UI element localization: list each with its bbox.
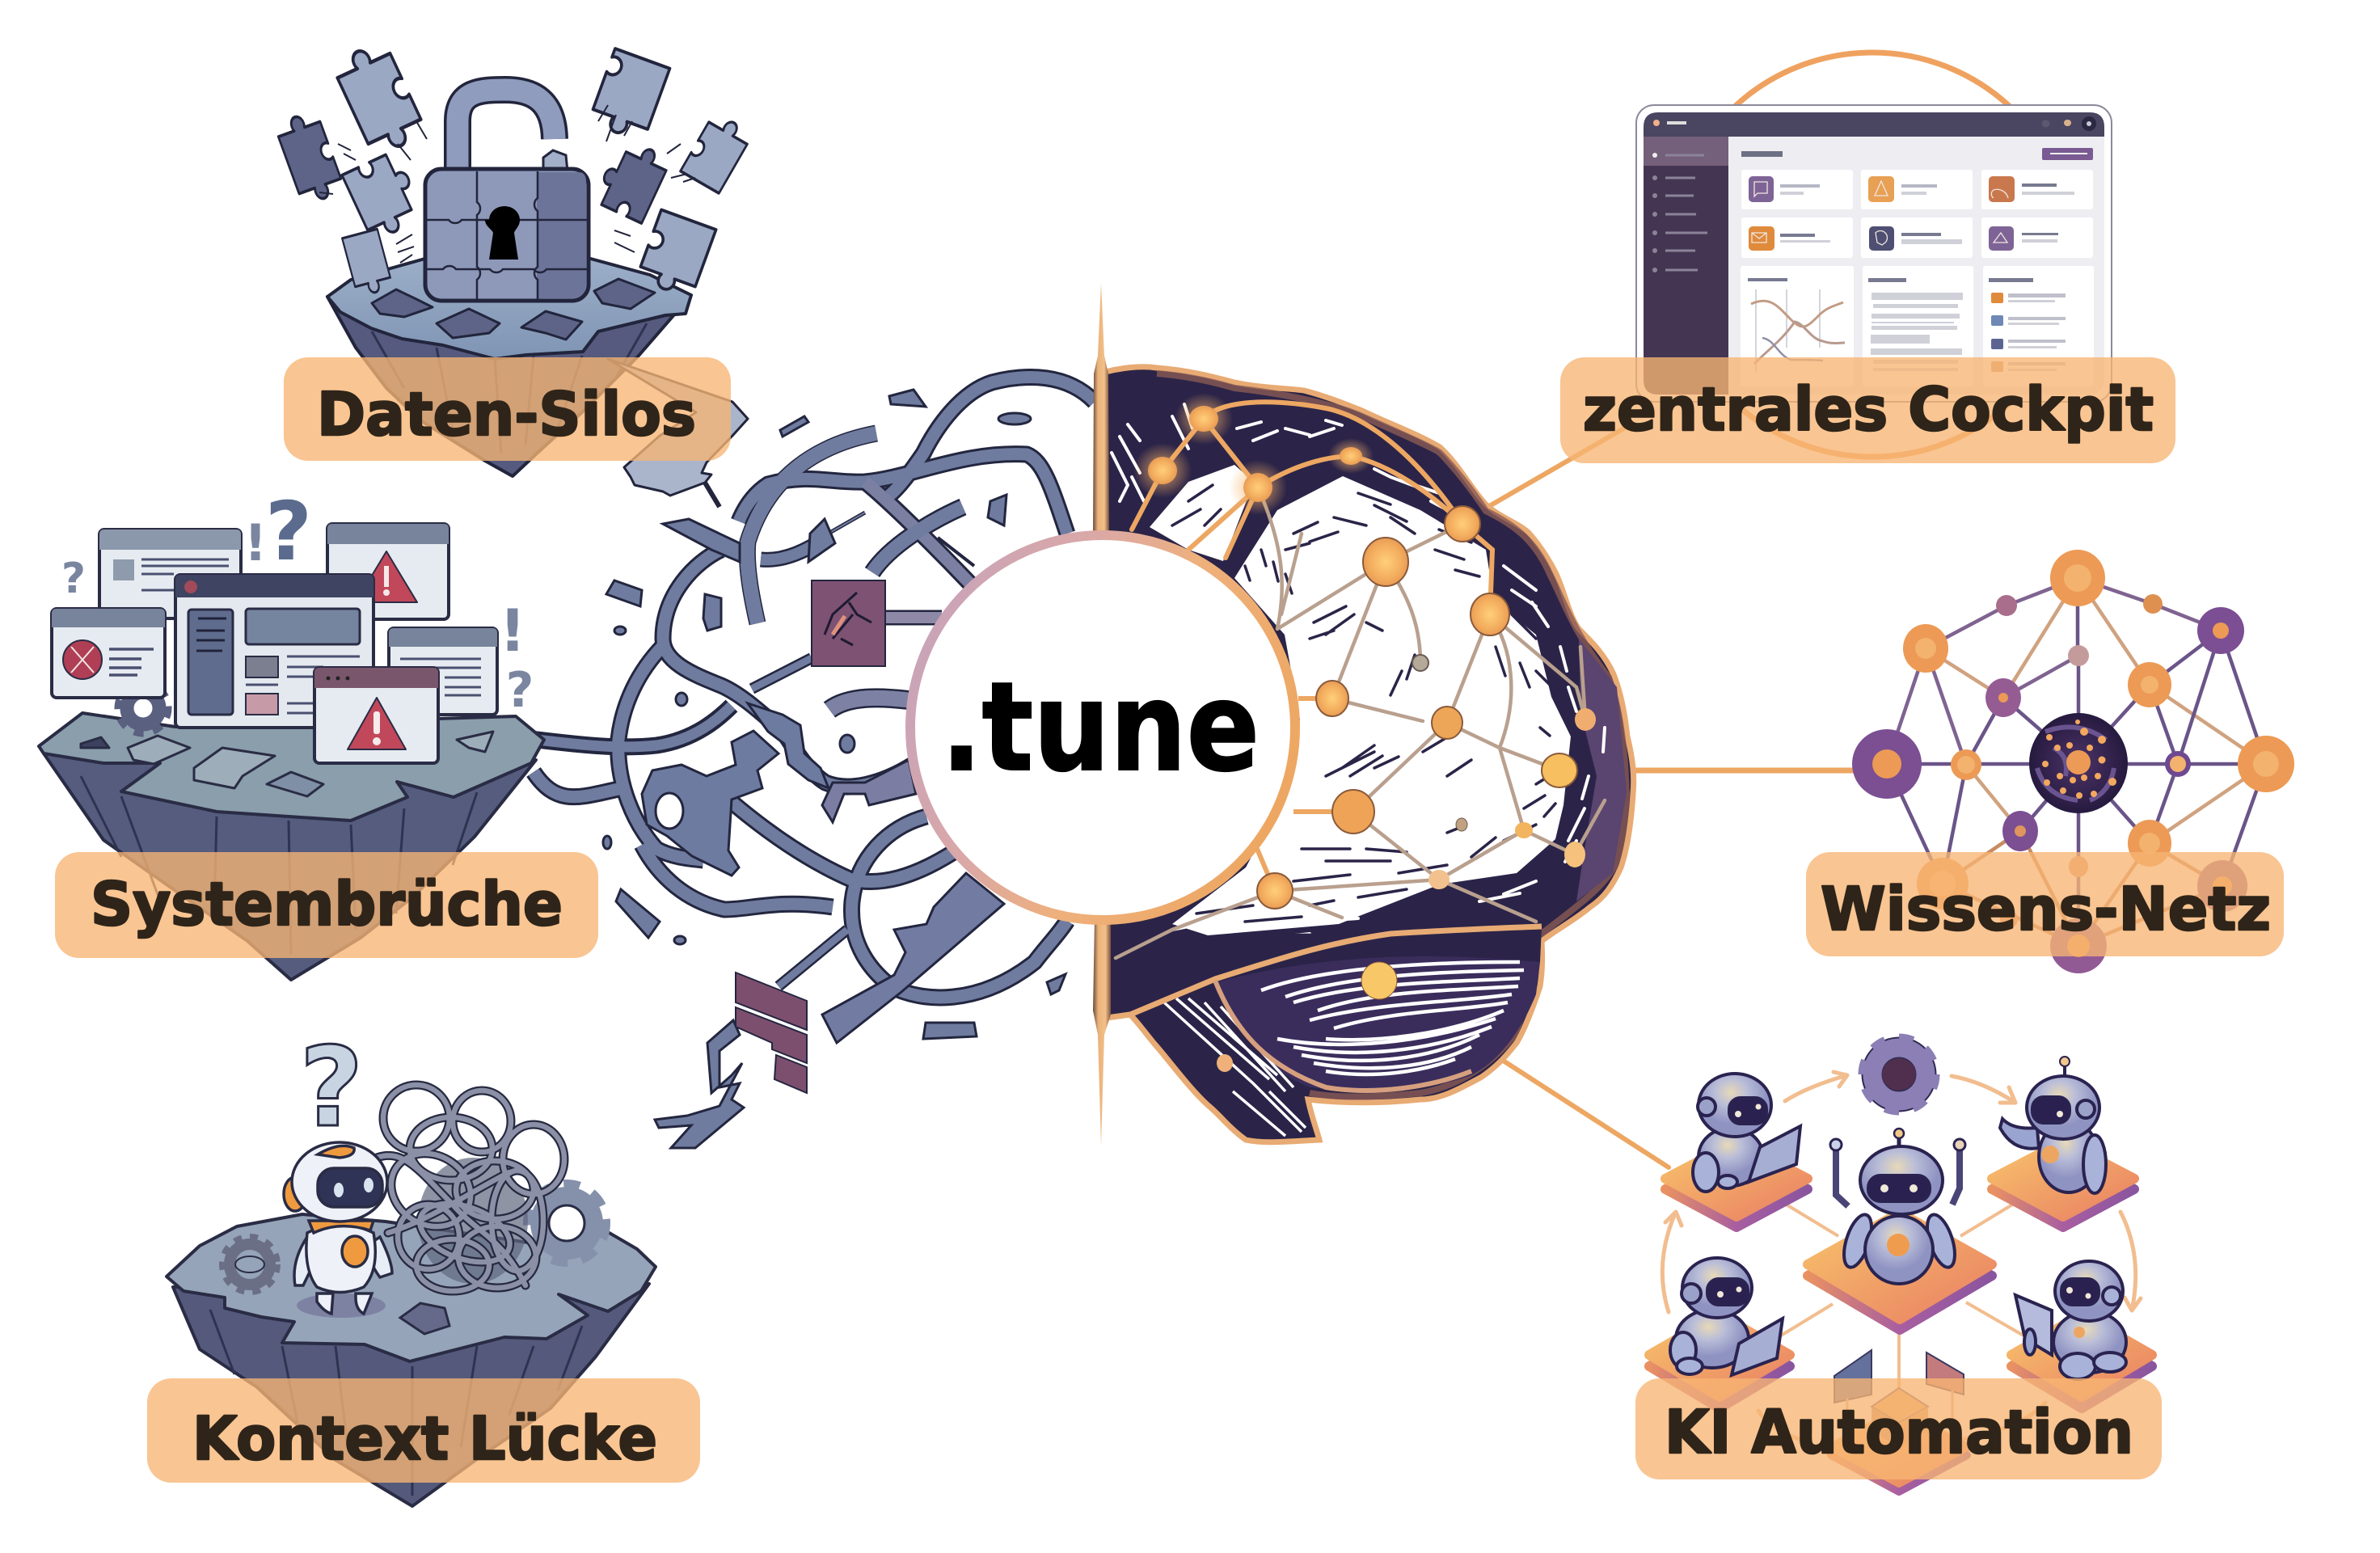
jagged cable section	[748, 703, 829, 788]
flying puzzle pieces	[274, 40, 753, 299]
broken shackle stub	[543, 150, 568, 171]
cards	[1741, 170, 2094, 386]
platform top-left	[1665, 1142, 1808, 1227]
padlock body	[425, 169, 589, 301]
large gear	[528, 1184, 606, 1262]
data cube and screens	[1834, 1350, 1964, 1447]
orange ring	[1670, 53, 2074, 457]
main window	[175, 575, 373, 728]
right window	[389, 628, 497, 715]
illustration: broken left brain of tangled cables	[477, 378, 1095, 1148]
rock cracks	[372, 323, 647, 453]
panel: Wissens-Netz illustration	[1852, 550, 2294, 973]
network nodes	[1852, 550, 2294, 973]
platform bottom-left	[1649, 1315, 1790, 1408]
card icons	[1749, 176, 2015, 251]
question and exclamation marks	[61, 484, 534, 719]
inner brown rim	[1157, 373, 1627, 1096]
device frame	[1636, 105, 2112, 402]
padlock shackle	[458, 90, 555, 171]
robot shadow	[297, 1293, 386, 1318]
rock debris	[400, 1303, 449, 1334]
cable strands	[477, 378, 1095, 998]
dark central sphere	[2029, 713, 2128, 813]
label: Wissens-Netz: Wissens-Netz	[1821, 875, 2271, 944]
network edges	[1887, 578, 2266, 946]
impact strokes	[319, 105, 695, 263]
cable fragments	[603, 390, 1066, 1039]
fallen pieces	[372, 279, 655, 340]
cortex lower band	[1107, 926, 1542, 1018]
robot bottom-right	[2015, 1261, 2126, 1379]
gear	[118, 683, 168, 733]
lock shadow	[537, 172, 586, 298]
panel: zentrales Cockpit illustration	[1636, 53, 2112, 457]
central ring with .tune logo	[910, 535, 1295, 920]
gear	[1863, 1038, 1935, 1111]
robot center	[1830, 1129, 1965, 1284]
blob opening	[656, 793, 683, 829]
question and exclamation marks: ?	[265, 484, 312, 579]
orange folds	[1107, 926, 1542, 1018]
outer glowing veins	[1132, 402, 1492, 614]
question and exclamation marks: !	[244, 513, 267, 572]
purple outer lobe	[1576, 639, 1627, 901]
label: zentrales Cockpit	[1560, 357, 2175, 463]
robot top-left	[1693, 1074, 1800, 1192]
line chart	[1751, 289, 1845, 372]
label: Kontext Lücke	[147, 1378, 700, 1483]
cerebellum outline	[1215, 981, 1471, 1091]
panel: KI Automation illustration	[1649, 1038, 2152, 1492]
panel: Kontext Lücke illustration	[167, 1024, 656, 1506]
cable connector band at ring	[822, 760, 916, 822]
question mark: ?	[300, 1024, 363, 1152]
label: zentrales Cockpit: zentrales Cockpit	[1583, 375, 2154, 445]
left error window	[52, 609, 165, 698]
label: Systembrüche	[55, 852, 598, 958]
question and exclamation marks: !	[500, 597, 525, 665]
cable tangle	[377, 1085, 564, 1291]
cable tip	[808, 519, 835, 562]
platform top-right	[1992, 1142, 2134, 1227]
small gear	[222, 1237, 277, 1292]
label: Daten-Silos	[284, 357, 731, 461]
card text lines	[1748, 184, 2074, 371]
panel: Systembrüche illustration	[39, 484, 544, 980]
robot bottom-left	[1670, 1258, 1783, 1375]
illustration: right neural brain	[1093, 283, 1634, 1146]
robot top-right	[2000, 1057, 2106, 1193]
header	[1644, 112, 2104, 137]
panel: Daten-Silos illustration	[274, 40, 753, 507]
floating island	[39, 713, 544, 980]
inner thin veins	[1116, 487, 1605, 958]
splinter	[705, 483, 719, 507]
dark hatching	[1172, 485, 1555, 922]
floating island	[327, 258, 691, 476]
label: Systembrüche: Systembrüche	[91, 870, 563, 939]
list icons	[1991, 293, 2003, 372]
back-right alert window	[327, 524, 449, 619]
platform bottom	[1831, 1411, 1967, 1492]
rock facets	[81, 776, 477, 954]
thick broken cable band	[822, 873, 1004, 1043]
label: KI Automation	[1635, 1378, 2162, 1479]
page title	[1741, 151, 1783, 157]
cerebellum white stripes	[1261, 962, 1524, 1074]
spine spikes	[1093, 283, 1109, 537]
lower jagged cable	[655, 1020, 744, 1148]
label: KI Automation: KI Automation	[1665, 1398, 2133, 1467]
maroon cracked box	[812, 580, 885, 666]
question and exclamation marks: ?	[61, 555, 86, 603]
label: Kontext Lücke: Kontext Lücke	[192, 1404, 657, 1474]
maroon stacked bars	[736, 973, 807, 1093]
platform bottom-right	[2011, 1315, 2152, 1408]
logo text: .tune	[941, 656, 1260, 799]
central tangled cable blob	[642, 731, 779, 876]
debris on surface	[81, 732, 493, 796]
label: Daten-Silos: Daten-Silos	[317, 380, 696, 449]
neural nodes	[1133, 393, 1596, 1072]
rock facets	[210, 1310, 582, 1496]
keyhole	[485, 206, 520, 260]
bottom puzzle piece	[608, 359, 748, 496]
white flecks in dark bands	[1112, 404, 1605, 962]
orbit and hub connectors	[1781, 1204, 2023, 1388]
screen	[1644, 112, 2104, 395]
connector lines	[1379, 428, 1856, 1167]
broken cable bar	[663, 519, 740, 562]
floating island	[167, 1214, 656, 1506]
question and exclamation marks: ?	[506, 662, 534, 719]
brain stem stripes	[1164, 998, 1306, 1136]
label: Wissens-Netz	[1806, 852, 2284, 956]
back-left window	[99, 530, 241, 618]
white top-left patch	[1150, 465, 1254, 561]
white interior of cortex	[1172, 476, 1571, 935]
robot	[284, 1142, 392, 1314]
brain silhouette	[1099, 367, 1634, 1142]
sidebar	[1644, 137, 1728, 395]
front alert window	[314, 668, 438, 763]
platform center	[1808, 1213, 1992, 1330]
cerebellum base	[1217, 956, 1540, 1091]
puzzle seams	[427, 171, 587, 299]
workflow arrows	[1662, 1072, 2141, 1443]
